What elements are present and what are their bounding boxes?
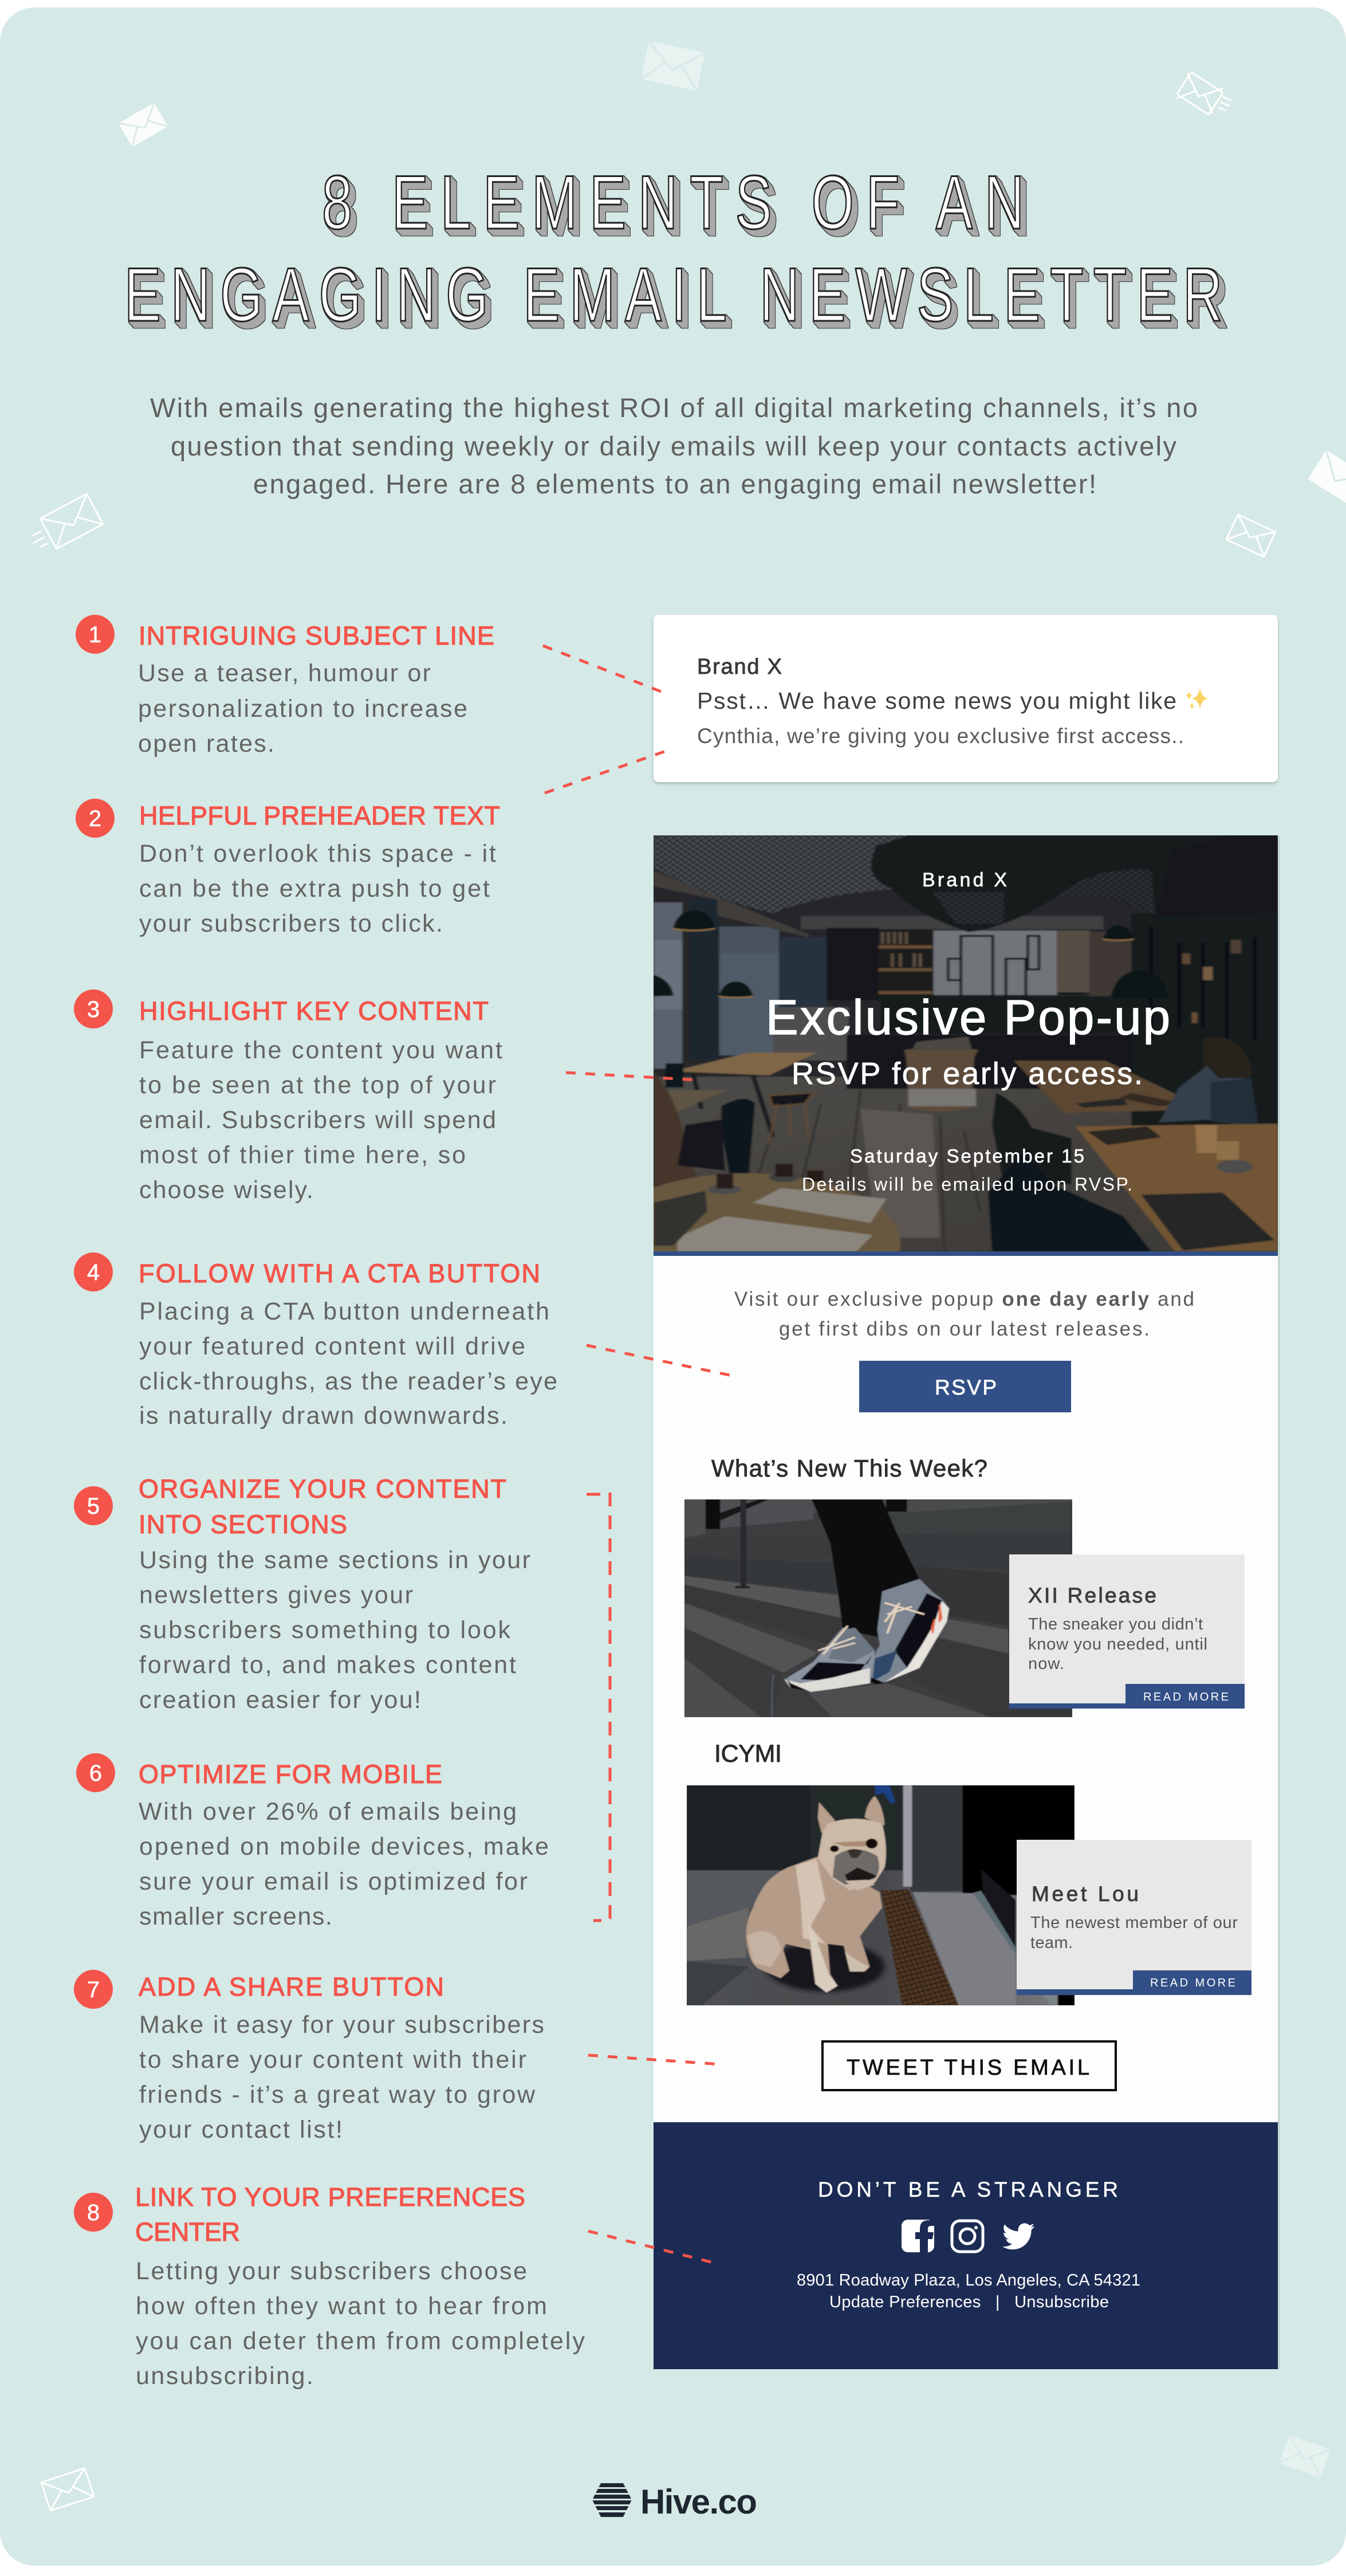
body 8: you can deter them from completely [136,2327,585,2355]
body 3 [139,1036,502,1204]
connector: subject line [543,646,666,693]
icon: sparkles [1186,687,1209,709]
body 6: opened on mobile devices, make [139,1833,549,1860]
card body: now. [1028,1655,1064,1673]
number badge 5 [74,1486,113,1525]
body 1 [138,659,467,757]
intro paragraph [150,392,1198,499]
connector: CTA button [587,1345,738,1377]
body 5: Using the same sections in your [139,1546,530,1574]
body 2: Don’t overlook this space - it [139,840,496,867]
number badge 1 [76,615,115,654]
text card [1009,1554,1245,1705]
body 6: sure your email is optimized for [139,1868,528,1895]
number badge 3 [74,989,113,1028]
body 7: to share your content with their [139,2046,526,2074]
preheader text: Cynthia, we’re giving you exclusive first access.. [697,724,1184,748]
body 5: newsletters gives your [139,1581,413,1609]
element 6: optimize for mobile [76,1753,549,1930]
body 5 [139,1546,530,1714]
body 5: forward to, and makes content [139,1651,516,1679]
bracket: sections and mobile [587,1493,610,1921]
text card [1017,1840,1251,1990]
body 7: friends - it’s a great way to grow [139,2081,536,2108]
article card: Meet Lou [687,1785,1251,2005]
body 2 [139,840,496,937]
body 8: unsubscribing. [136,2362,313,2390]
element 1: intriguing subject line [76,615,494,757]
hero headline: Exclusive Pop-up [766,991,1170,1045]
footer heading: DON’T BE A STRANGER [818,2178,1118,2201]
element 3: highlight key content [74,989,502,1204]
body 3: choose wisely. [139,1176,313,1204]
body 3: email. Subscribers will spend [139,1106,496,1134]
email inbox preview card [654,615,1278,782]
card body: The sneaker you didn’t [1028,1615,1203,1633]
body 2: can be the extra push to get [139,875,490,902]
number badge 7: 7 [87,1977,100,2002]
body 5: creation easier for you! [139,1686,421,1714]
number badge 6: 6 [89,1761,102,1786]
sender name: Brand X [697,655,782,679]
body 4: your featured content will drive [139,1333,525,1360]
card body: know you needed, until [1028,1635,1207,1654]
body 4 [139,1298,557,1430]
connector: preferences [588,2231,718,2264]
body 1: Use a teaser, humour or [138,659,431,687]
number badge 1: 1 [89,622,101,647]
footer address and links: Update Preferences | Unsubscribe [829,2293,1109,2311]
body 7 [139,2011,544,2143]
number badge 7 [74,1970,113,2009]
heading 8: CENTER [135,2217,240,2247]
Hive.co logo [592,2483,756,2517]
body 5: subscribers something to look [139,1616,511,1644]
card title: Meet Lou [1032,1882,1139,1906]
footer address and links [797,2271,1140,2311]
RSVP button [859,1361,1071,1412]
card body [1028,1615,1207,1673]
heading 8: LINK TO YOUR PREFERENCES [135,2182,525,2212]
read more button: READ MORE [1150,1977,1235,1989]
body 6 [139,1798,549,1930]
heading 5: ORGANIZE YOUR CONTENT [139,1474,506,1503]
element 2: helpful preheader text [76,799,500,937]
footer address and links: 8901 Roadway Plaza, Los Angeles, CA 54321 [797,2271,1140,2290]
hero details: Details will be emailed upon RVSP. [802,1174,1132,1195]
hero photo: cafe interior [654,835,1278,1251]
number badge 6 [76,1753,115,1792]
number badge 8: 8 [87,2200,100,2225]
section heading: ICYMI: ICYMI [714,1740,782,1768]
intro copy: Visit our exclusive popup one day early and [734,1288,1194,1310]
tweet button: TWEET THIS EMAIL [847,2056,1089,2080]
title: 8 ELEMENTS OF AN [322,159,1024,245]
body 1: personalization to increase [138,695,467,722]
envelope: top left filled [119,103,168,147]
element 8: link to your preferences center [74,2182,585,2390]
connector: share button [588,2055,721,2064]
connector: key content [566,1073,698,1080]
RSVP button: RSVP [935,1376,997,1399]
envelope: bottom right filled [1279,2435,1331,2477]
article card: XII Release [684,1499,1245,1717]
body 8: Letting your subscribers choose [136,2257,527,2285]
element 5: organize your content into sections [74,1474,530,1714]
title [124,159,1222,337]
connector lines [543,646,738,2264]
body 6: With over 26% of emails being [139,1798,517,1825]
element 7: add a share button [74,1970,544,2143]
footer [654,2122,1278,2369]
heading 7: ADD A SHARE BUTTON [139,1972,444,2001]
body 7: your contact list! [139,2116,343,2143]
wordmark: Hive.co [640,2483,757,2521]
section heading: what's new: What’s New This Week? [711,1455,987,1482]
body 4: click-throughs, as the reader’s eye [139,1368,557,1395]
intro paragraph: With emails generating the highest ROI of all digital marketing channels, it’s no [150,392,1198,423]
intro copy: get first dibs on our latest releases. [779,1318,1150,1340]
envelope: right edge filled [1308,450,1346,505]
envelope: right outline [1226,515,1276,557]
intro copy [734,1288,1194,1340]
card body [1030,1914,1238,1952]
heading 1: INTRIGUING SUBJECT LINE [139,621,494,650]
heading 8 [135,2182,525,2247]
icon: facebook [902,2220,934,2252]
icon: twitter [1002,2223,1034,2249]
read more button [1125,1684,1245,1709]
icon: instagram [952,2221,983,2252]
envelope: bottom left outline [41,2468,94,2511]
hero section [594,835,1278,1313]
body 3: most of thier time here, so [139,1141,466,1169]
number badge 5: 5 [87,1494,100,1519]
heading 6: OPTIMIZE FOR MOBILE [139,1760,442,1789]
body 3: Feature the content you want [139,1036,502,1064]
heading 4: FOLLOW WITH A CTA BUTTON [139,1259,540,1288]
number badge 2: 2 [89,806,101,831]
intro paragraph: engaged. Here are 8 elements to an engaging email newsletter! [253,469,1096,499]
photo: sneakers on steps [684,1499,1072,1717]
icon: striped hexagon [592,2483,631,2517]
body 8 [136,2257,585,2390]
envelope: top centre filled [641,41,705,91]
number badge 2 [76,799,115,838]
envelope: top right outline [1174,66,1238,125]
body 3: to be seen at the top of your [139,1071,496,1099]
photo: french bulldog [687,1785,1075,2005]
hero date: Saturday September 15 [850,1145,1084,1167]
hero brand label: Brand X [922,869,1007,891]
hero blue rule [654,1251,1278,1256]
body 4: Placing a CTA button underneath [139,1298,549,1325]
body 4: is naturally drawn downwards. [139,1402,507,1430]
tweet button [822,2041,1116,2090]
heading 3: HIGHLIGHT KEY CONTENT [139,996,489,1026]
body 6: smaller screens. [139,1903,332,1930]
newsletter email mock [594,835,1280,2369]
body 7: Make it easy for your subscribers [139,2011,544,2039]
body 1: open rates. [138,730,274,757]
card title: XII Release [1028,1584,1156,1607]
number badge 4 [74,1252,113,1291]
number badge 8 [74,2193,113,2232]
number badge 4: 4 [87,1260,100,1285]
heading 2: HELPFUL PREHEADER TEXT [139,801,500,830]
read more button: READ MORE [1143,1691,1229,1703]
element 4: follow with a CTA button [74,1252,557,1430]
title: ENGAGING EMAIL NEWSLETTER [124,252,1222,337]
heading 5 [139,1474,506,1539]
read more button [1133,1970,1251,1995]
card body: team. [1030,1934,1073,1952]
card body: The newest member of our [1030,1914,1238,1932]
body 2: your subscribers to click. [139,910,443,937]
hero subheadline: RSVP for early access. [792,1057,1143,1091]
connector: preheader [545,750,669,793]
body 8: how often they want to hear from [136,2292,547,2320]
number badge 3: 3 [87,997,100,1022]
intro paragraph: question that sending weekly or daily emails will keep your contacts actively [171,431,1176,461]
heading 5: INTO SECTIONS [139,1510,347,1539]
envelope: left outline with speed lines [25,494,103,557]
subject line: Psst… We have some news you might like [697,688,1176,714]
